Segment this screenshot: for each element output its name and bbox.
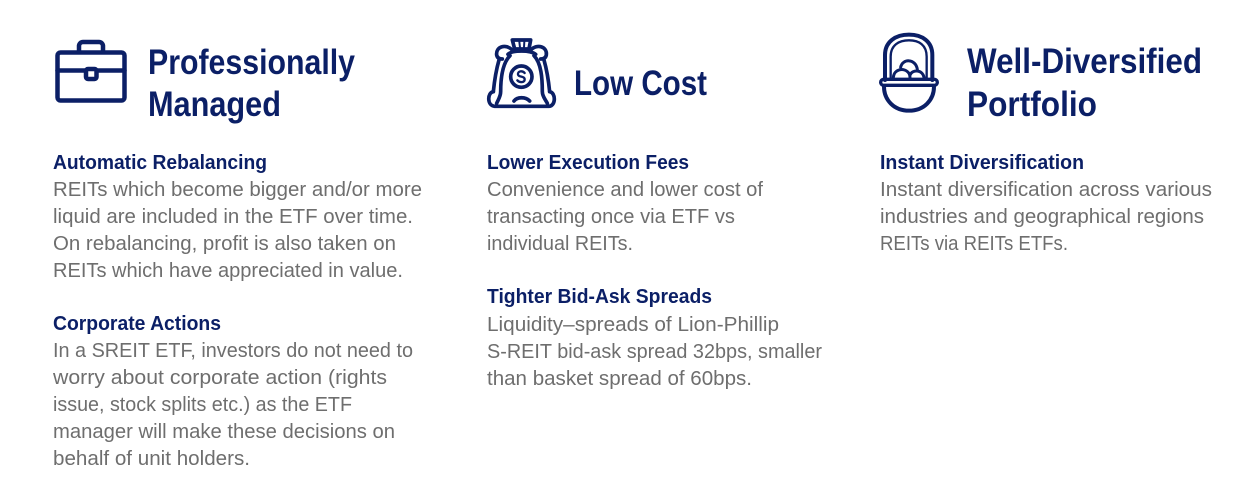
heading: professionally managed bbox=[148, 43, 355, 124]
text block: lower execution fees: Convenience and lower cost of bbox=[487, 179, 763, 201]
text block: lower execution fees: Lower Execution Fees bbox=[487, 152, 689, 174]
text block: tighter bid-ask spreads bbox=[487, 286, 822, 390]
text block: instant diversification: Instant diversification across various bbox=[880, 179, 1212, 201]
heading: well-diversified portfolio: Well-Diversified bbox=[967, 42, 1202, 81]
text block: automatic rebalancing: REITs which become bigger and/or more bbox=[53, 179, 422, 201]
panel: well-diversified portfolio bbox=[880, 35, 1212, 255]
text block: corporate actions: issue, stock splits etc.) as the ETF bbox=[53, 394, 352, 416]
text block: tighter bid-ask spreads: than basket spread of 60bps. bbox=[487, 368, 752, 390]
text block: corporate actions: worry about corporate action (rights bbox=[52, 367, 387, 389]
panel: low cost bbox=[487, 40, 822, 390]
text block: automatic rebalancing: Automatic Rebalancing bbox=[53, 152, 267, 174]
text block: lower execution fees: individual REITs. bbox=[487, 233, 633, 255]
text block: lower execution fees bbox=[487, 152, 763, 255]
panel: professionally managed bbox=[52, 42, 422, 470]
text block: corporate actions bbox=[52, 313, 413, 470]
text block: tighter bid-ask spreads: S-REIT bid-ask spread 32bps, smaller bbox=[487, 341, 822, 363]
text block: instant diversification: REITs via REITs ETFs. bbox=[880, 233, 1068, 255]
text block: instant diversification bbox=[880, 152, 1212, 255]
icon: basket with eggs bbox=[881, 35, 937, 111]
heading: well-diversified portfolio bbox=[967, 42, 1202, 124]
text block: corporate actions: behalf of unit holders. bbox=[53, 448, 250, 470]
icon: money bag bbox=[489, 40, 554, 106]
heading: professionally managed: Managed bbox=[148, 85, 281, 124]
text block: lower execution fees: transacting once via ETF vs bbox=[487, 206, 735, 228]
text block: automatic rebalancing: REITs which have appreciated in value. bbox=[53, 260, 403, 282]
text block: automatic rebalancing bbox=[53, 152, 422, 282]
icon: briefcase bbox=[58, 42, 124, 100]
text block: corporate actions: In a SREIT ETF, investors do not need to bbox=[53, 340, 413, 362]
text block: automatic rebalancing: On rebalancing, profit is also taken on bbox=[53, 233, 396, 255]
heading: professionally managed: Professionally bbox=[148, 43, 355, 82]
text block: instant diversification: Instant Diversification bbox=[880, 152, 1084, 174]
heading: well-diversified portfolio: Portfolio bbox=[967, 85, 1097, 124]
text block: instant diversification: industries and geographical regions bbox=[880, 206, 1204, 228]
heading: low cost: Low Cost bbox=[574, 64, 707, 103]
text block: corporate actions: Corporate Actions bbox=[53, 313, 221, 335]
text block: tighter bid-ask spreads: Liquidity–spreads of Lion-Phillip bbox=[487, 314, 779, 336]
text block: corporate actions: manager will make these decisions on bbox=[53, 421, 395, 443]
text block: tighter bid-ask spreads: Tighter Bid-Ask Spreads bbox=[487, 286, 712, 308]
text block: automatic rebalancing: liquid are included in the ETF over time. bbox=[53, 206, 413, 228]
